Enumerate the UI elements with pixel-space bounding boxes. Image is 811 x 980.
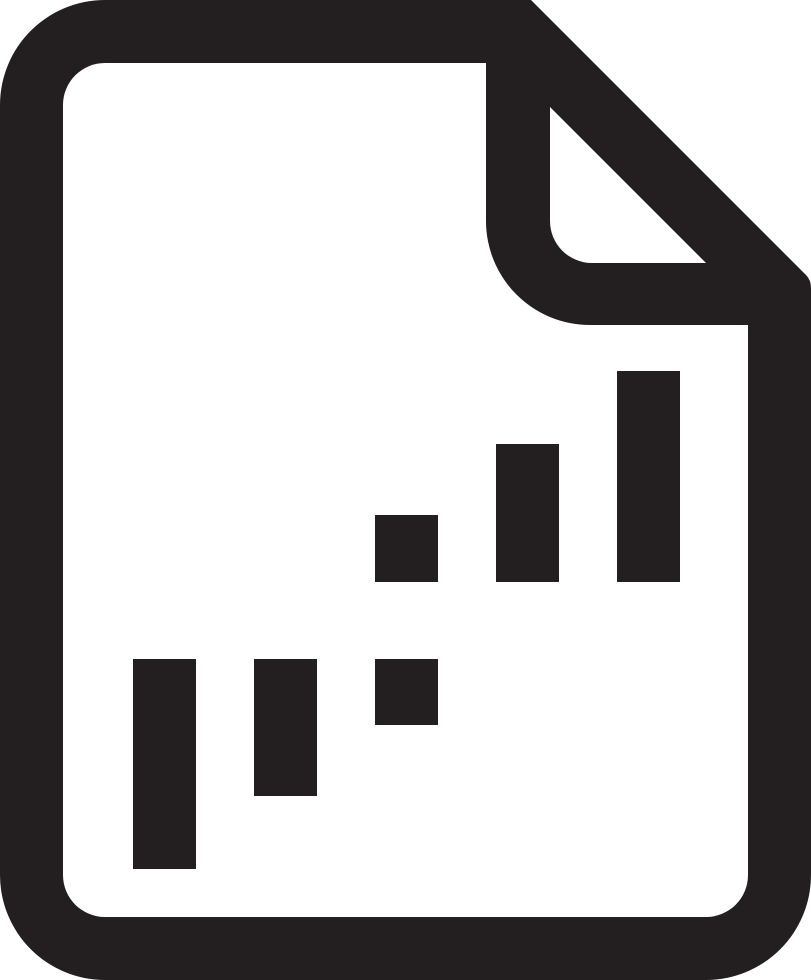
bar 3 upper bbox=[375, 515, 438, 582]
bar chart bbox=[133, 371, 680, 869]
bar 5 bbox=[617, 371, 680, 582]
bar 1 bbox=[133, 659, 196, 869]
bar 2 bbox=[254, 659, 317, 796]
bar 4 bbox=[496, 444, 559, 582]
bar 3 lower bbox=[375, 659, 438, 725]
